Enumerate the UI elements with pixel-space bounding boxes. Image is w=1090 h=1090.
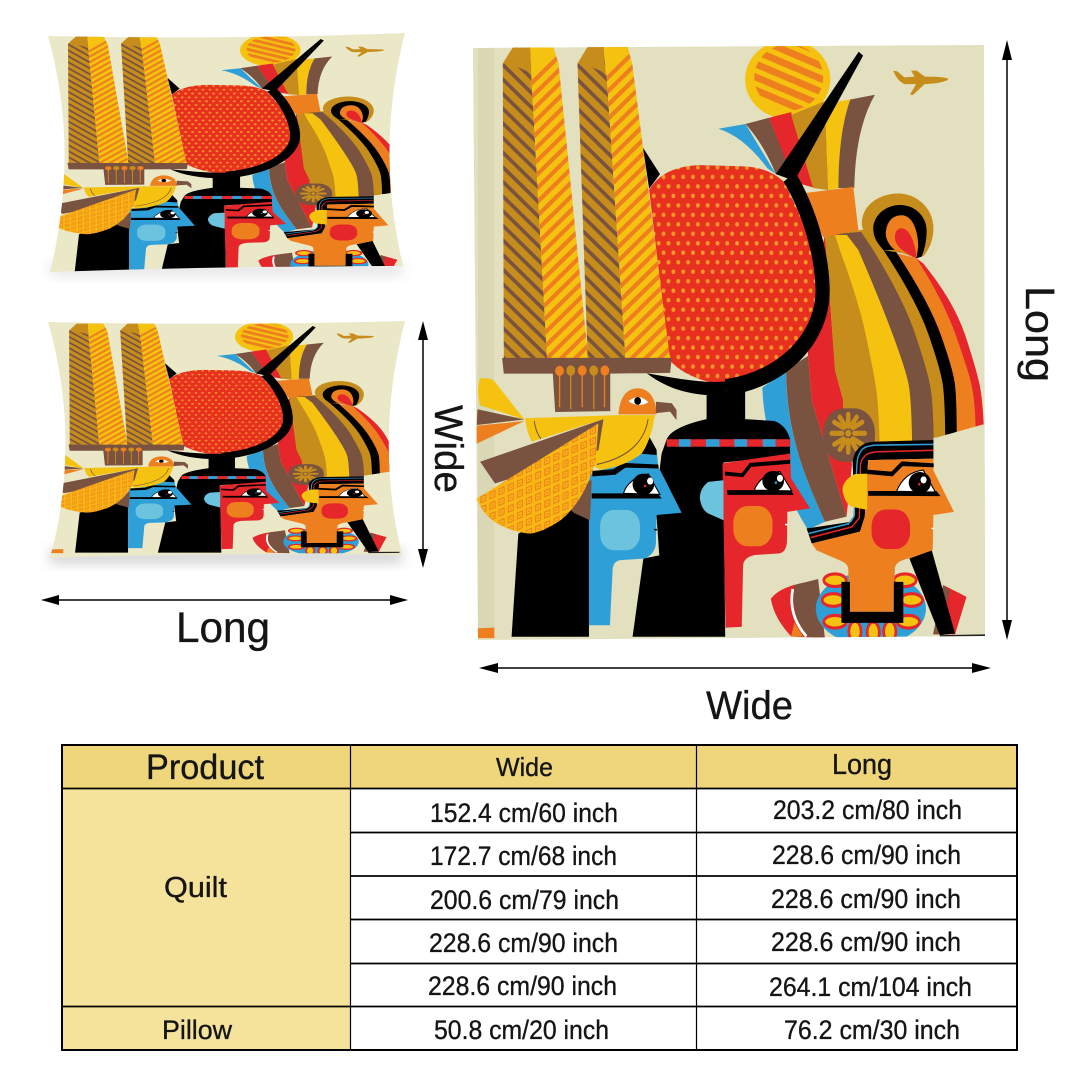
wide column values — [428, 798, 619, 1045]
wide column values: 228.6 cm/90 inch — [429, 928, 618, 958]
long column values: 203.2 cm/80 inch — [773, 795, 962, 825]
label: pillow long: Long — [176, 604, 270, 652]
arrow: pillow long — [41, 595, 408, 605]
wide column values: 228.6 cm/90 inch — [428, 971, 617, 1001]
table header: Wide — [496, 752, 553, 782]
long column values: 264.1 cm/104 inch — [769, 972, 972, 1002]
size table — [62, 745, 1017, 1050]
pillow: top — [40, 25, 415, 280]
long column values: 228.6 cm/90 inch — [771, 927, 961, 957]
product cells: Quilt — [164, 872, 227, 904]
long column values: 228.6 cm/90 inch — [772, 840, 961, 870]
product cells: Pillow — [162, 1015, 232, 1045]
wide column values: 50.8 cm/20 inch — [434, 1015, 609, 1045]
label: quilt wide: Wide — [706, 684, 793, 728]
arrow: quilt long — [1002, 40, 1012, 640]
pillow: bottom — [40, 315, 415, 565]
wide column values: 172.7 cm/68 inch — [430, 841, 617, 871]
long column values: 228.6 cm/90 inch — [771, 884, 961, 914]
arrow: quilt wide — [479, 663, 991, 673]
arrow: pillow wide — [418, 321, 428, 568]
table header: Long — [832, 749, 892, 781]
long column values — [769, 795, 972, 1045]
product cells — [62, 788, 350, 1050]
table header — [62, 745, 1017, 788]
long column values: 76.2 cm/30 inch — [784, 1015, 960, 1045]
wide column values: 200.6 cm/79 inch — [430, 885, 619, 915]
table header: Product — [146, 748, 264, 787]
label: quilt long: Long — [1017, 286, 1063, 382]
quilt — [470, 40, 990, 645]
wide column values: 152.4 cm/60 inch — [430, 798, 618, 828]
label: pillow wide: Wide — [426, 405, 470, 493]
